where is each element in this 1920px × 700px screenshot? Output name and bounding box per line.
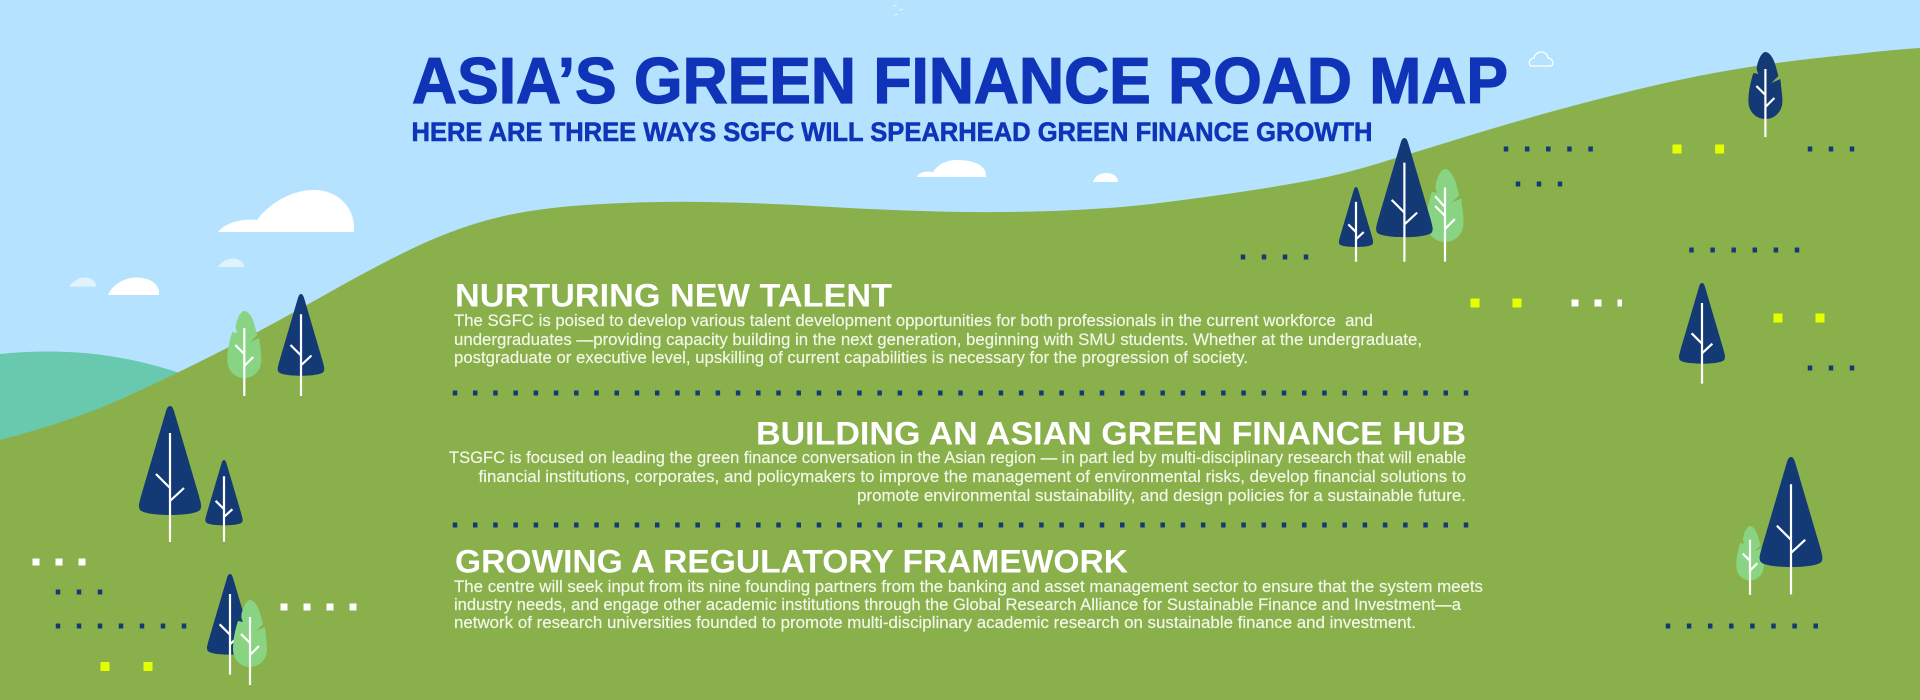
dots: top right navy row: [1808, 146, 1854, 152]
section: nurturing new talent: [454, 278, 1422, 367]
heading: building hub: BUILDING AN ASIAN GREEN FINANCE HUB: [756, 416, 1466, 452]
dots: left yellow pair: [100, 662, 152, 671]
heading: regulatory framework: GROWING A REGULATORY FRAMEWORK: [455, 544, 1129, 580]
body: regulatory framework: [454, 578, 1483, 632]
body: building hub: financial institutions, corporates, and policymakers to improve the management of environmental risks, develop financial solutions to: [478, 468, 1466, 486]
cloud: faint left: [69, 278, 96, 287]
body: building hub: promote environmental sustainability, and design policies for a sustainable future.: [857, 487, 1466, 505]
body: nurturing new talent: postgraduate or executive level, upskilling of current capabilities is necessary for the progression of society.: [454, 349, 1248, 367]
dots: left navy long row: [56, 624, 186, 628]
tree: lower right navy: [1760, 457, 1822, 594]
dots: second navy row: [1516, 182, 1562, 186]
body: nurturing new talent: [454, 312, 1422, 367]
dots: navy row by trees: [1241, 254, 1308, 260]
dots: top yellow pair: [1672, 144, 1724, 154]
cloud: centre large: [917, 160, 986, 177]
dots: right yellow pair: [1774, 314, 1824, 322]
tree: lower navy: [207, 574, 253, 675]
tree: lower light leaf: [233, 600, 267, 685]
dots: left navy short row: [56, 590, 102, 594]
cloud: small left: [108, 278, 159, 295]
tree: hillside light leaf: [1426, 169, 1464, 262]
cloud: centre small: [1093, 173, 1118, 182]
dots: left white row: [32, 558, 86, 566]
tree: hillside small navy: [1339, 187, 1373, 262]
dots: right navy row: [1689, 248, 1799, 252]
dots: top navy row: [1504, 146, 1593, 152]
tree: large navy: [139, 406, 201, 542]
dots: centre yellow pair: [1470, 298, 1522, 308]
body: nurturing new talent: The SGFC is poised to develop various talent development opportunities for both professionals in the current workforce and: [454, 312, 1373, 330]
body: regulatory framework: The centre will seek input from its nine founding partners from the banking and asset management sector to ensure that the system meets: [454, 578, 1483, 596]
section: building an asian green finance hub: [449, 416, 1466, 505]
tree: ridge navy leaf: [1748, 52, 1782, 137]
dots: centre white row: [1572, 300, 1622, 306]
section: growing a regulatory framework: [454, 544, 1483, 632]
body: building hub: [449, 449, 1466, 505]
body: regulatory framework: network of research universities founded to promote multi-disciplinary academic research on sustainable finance and investment.: [454, 614, 1416, 632]
cloud: outline: [1529, 52, 1553, 66]
dots: right navy short row: [1808, 366, 1854, 370]
tree: right navy: [1679, 283, 1725, 384]
cloud: faint upper: [218, 258, 244, 267]
tree: lower right light leaf: [1736, 526, 1764, 595]
dots: left lower white row: [280, 604, 356, 610]
subtitle: HERE ARE THREE WAYS SGFC WILL SPEARHEAD GREEN FINANCE GROWTH: [412, 117, 1372, 147]
title: ASIA’S GREEN FINANCE ROAD MAP: [412, 44, 1508, 117]
body: building hub: TSGFC is focused on leading the green finance conversation in the Asian region — in part led by multi-disciplinary research that will enable: [449, 449, 1466, 467]
tree: hillside tall navy: [1376, 138, 1433, 262]
dots: bottom right navy row: [1666, 624, 1818, 628]
body: regulatory framework: industry needs, and engage other academic institutions through the Global Research Alliance for Sustainable Finance and Investment—a: [454, 596, 1462, 614]
tree: left navy: [278, 294, 324, 396]
birds: [893, 5, 903, 15]
body: nurturing new talent: undergraduates —providing capacity building in the next generation, beginning with SMU students. Whether at the undergraduate,: [454, 331, 1422, 349]
tree: left light leaf: [227, 311, 261, 396]
tree: small navy: [205, 460, 243, 542]
distant teal hill: [0, 352, 185, 450]
cloud: large left: [218, 190, 354, 232]
heading: nurturing new talent: NURTURING NEW TALENT: [455, 278, 892, 314]
